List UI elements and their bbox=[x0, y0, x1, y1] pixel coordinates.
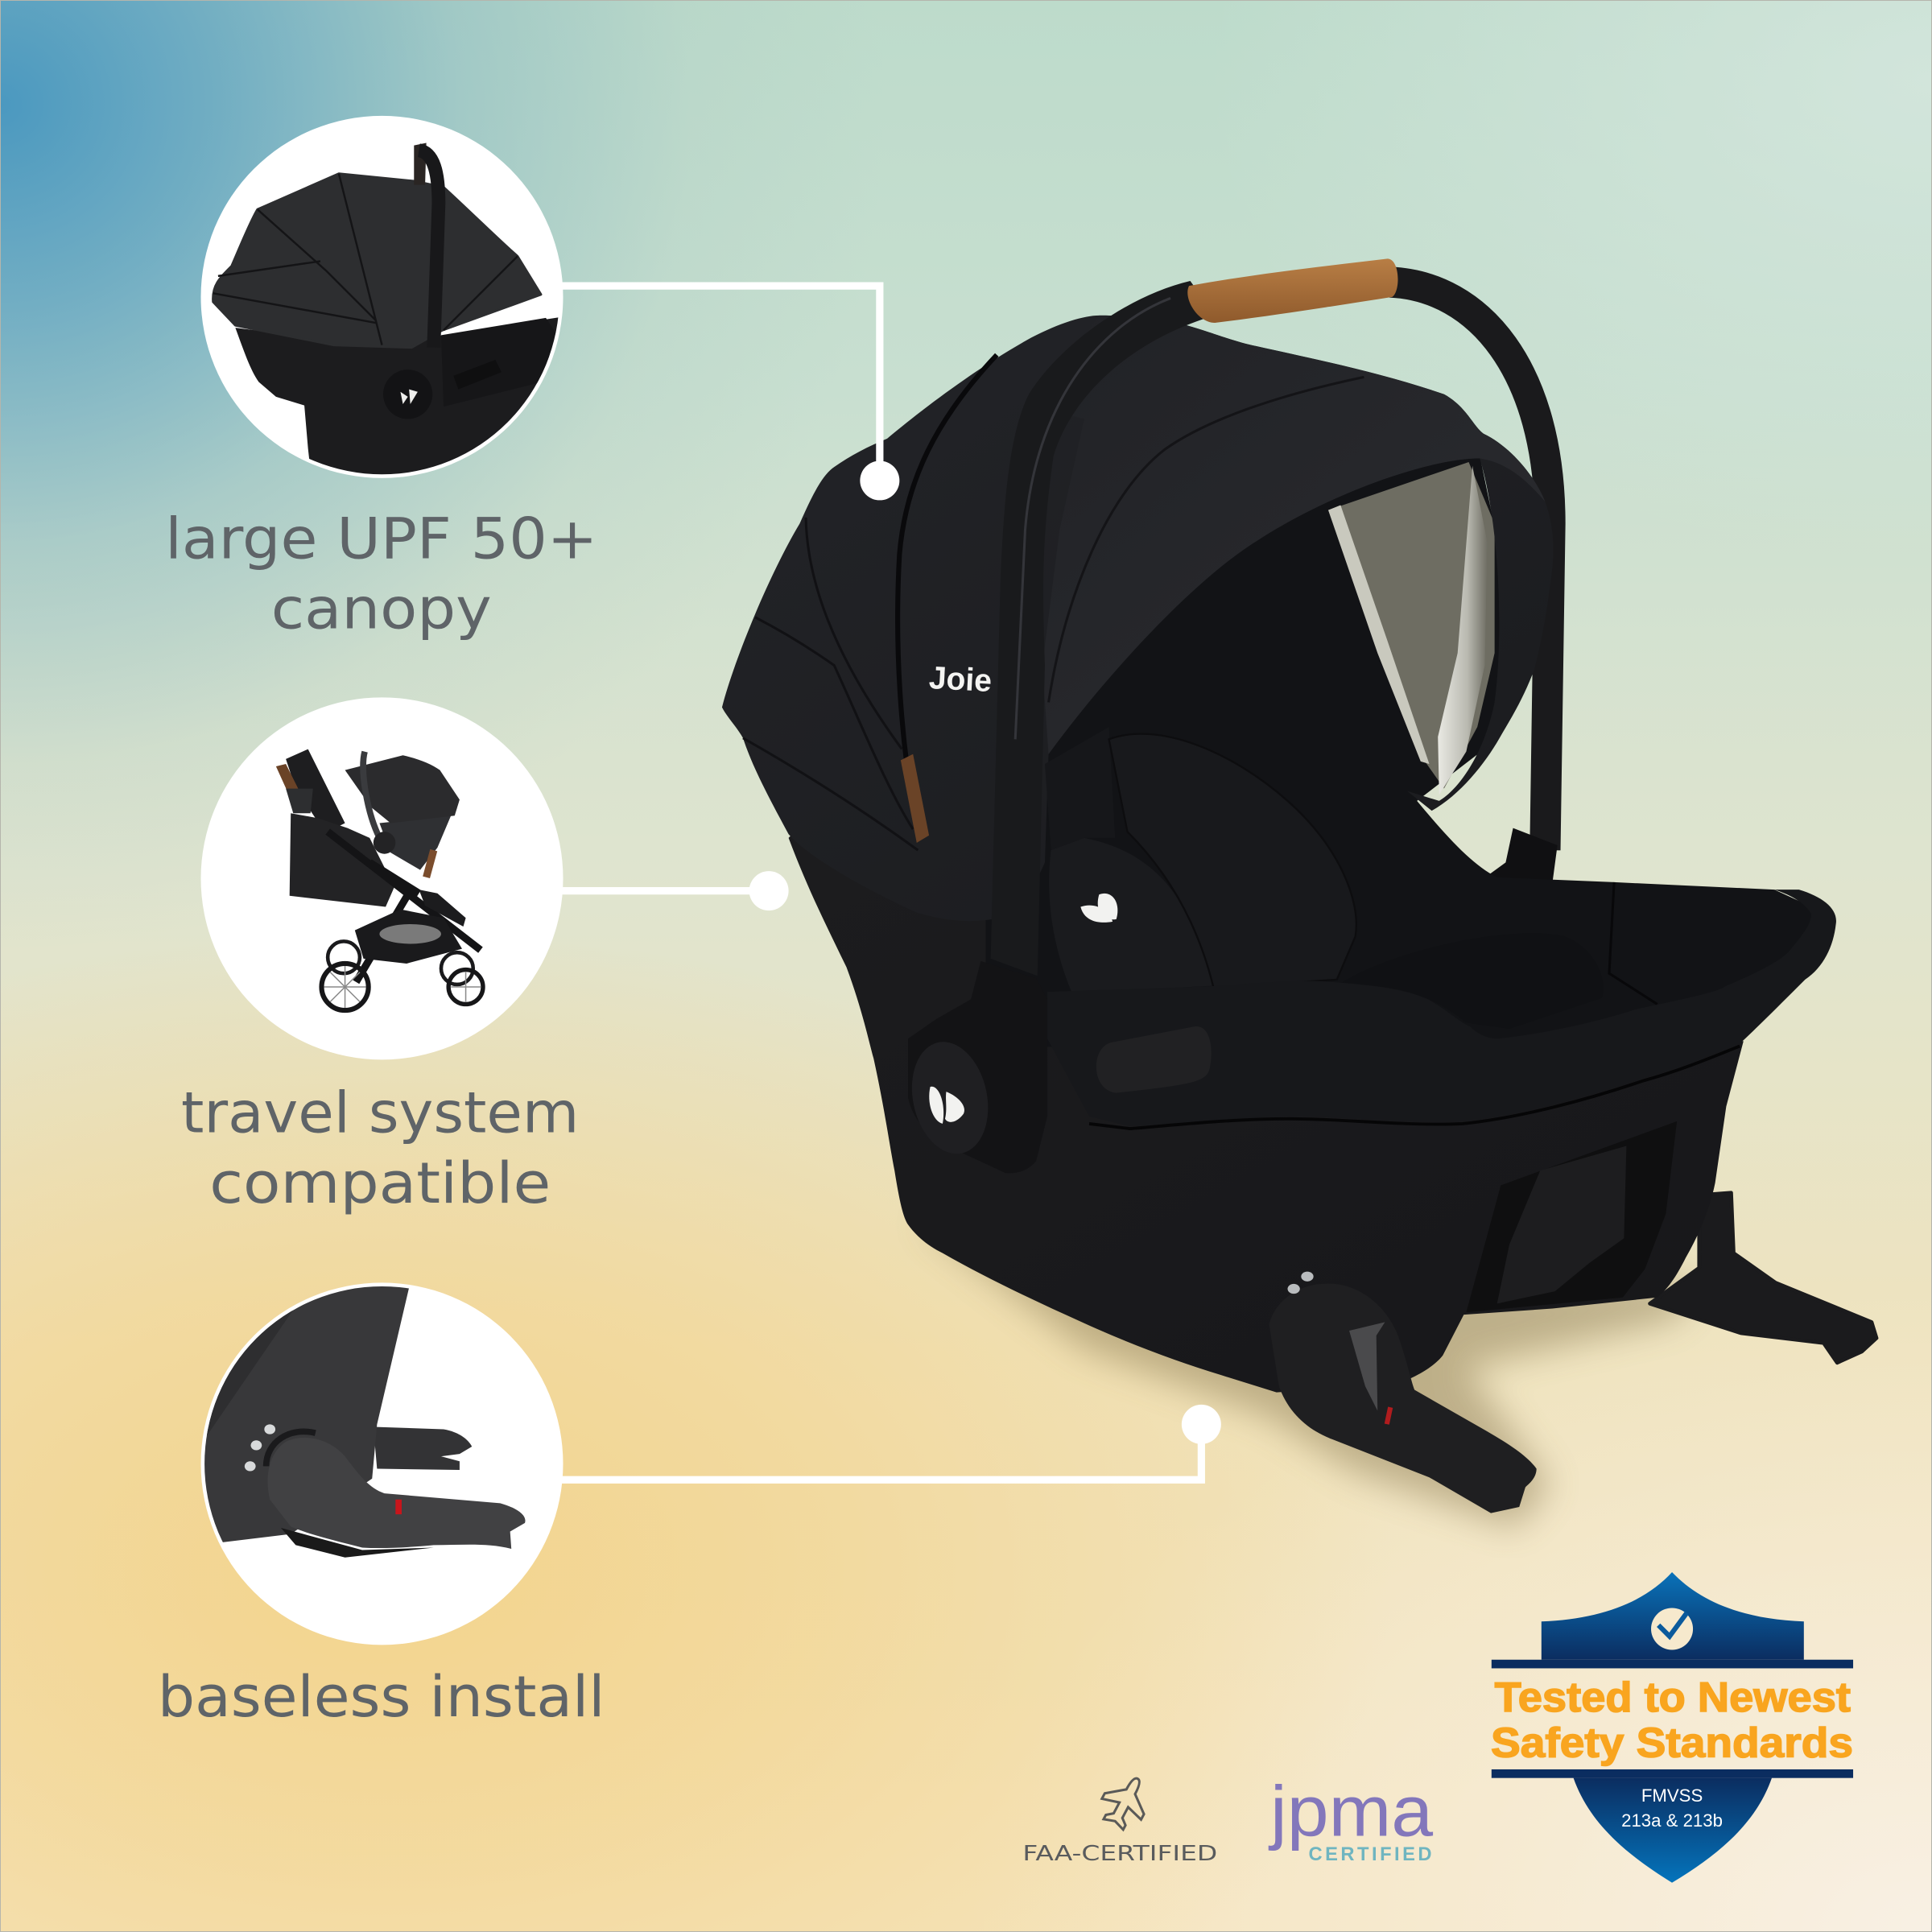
label: baseless install: baseless install bbox=[158, 1664, 605, 1730]
label: canopy bbox=[165, 506, 597, 642]
rear wheel near bbox=[321, 964, 369, 1010]
infant seat shell bbox=[379, 815, 451, 870]
icon: seat leaf logo bbox=[1080, 894, 1117, 923]
infant seat handle bbox=[363, 752, 379, 838]
stroller illustration bbox=[276, 749, 483, 1010]
tan frame grip bbox=[427, 850, 434, 877]
inset dots bbox=[245, 1424, 275, 1472]
safety badge bbox=[1491, 1572, 1853, 1883]
standard text: 213a & 213b bbox=[1621, 1810, 1723, 1831]
hub oval bbox=[902, 1034, 998, 1161]
canopy shell bbox=[722, 316, 1554, 921]
stroller frame bbox=[328, 832, 481, 982]
stroller back canopy bbox=[286, 749, 345, 833]
connector: baseless install bbox=[557, 1405, 1221, 1480]
stroller handle bbox=[276, 764, 298, 794]
inset handle bbox=[419, 151, 439, 348]
inset shell bbox=[204, 1286, 409, 1542]
icon: hub leaf logo bbox=[929, 1087, 964, 1124]
FAA certified mark: FAA-CERTIFIED bbox=[1022, 1842, 1217, 1866]
light trim strip bbox=[1328, 506, 1430, 764]
cup holder bbox=[286, 789, 313, 813]
shield bottom bbox=[1574, 1778, 1772, 1883]
inset darker wedge bbox=[206, 1311, 293, 1436]
near foot bbox=[1269, 1284, 1537, 1513]
under basket bbox=[355, 910, 462, 964]
rear handle pivot bbox=[1479, 828, 1558, 882]
front wheel near bbox=[448, 970, 483, 1004]
panel: canopy circle bbox=[200, 116, 579, 493]
inset button bbox=[457, 361, 499, 390]
label: travel system: compatible bbox=[209, 1150, 551, 1216]
lower band bbox=[1492, 1769, 1853, 1778]
leg cushion bbox=[1337, 933, 1604, 1029]
red indicator bbox=[1385, 1407, 1393, 1425]
inset handle grip end bbox=[414, 143, 427, 185]
seat rim bbox=[1047, 890, 1836, 1126]
badge headline bbox=[1491, 1674, 1853, 1767]
inset canopy bbox=[213, 174, 541, 348]
FAA certified mark bbox=[1022, 1769, 1217, 1866]
seat interior bbox=[985, 450, 1836, 1047]
olive canopy panel bbox=[1328, 462, 1495, 789]
zipper bbox=[898, 355, 997, 834]
label: travel system bbox=[181, 1080, 579, 1216]
upper band bbox=[1492, 1660, 1853, 1668]
front carry handle arm bbox=[991, 281, 1215, 976]
stroller basket seat bbox=[290, 813, 394, 907]
connector: canopy bbox=[557, 286, 899, 500]
label: canopy: large UPF 50+ bbox=[165, 506, 597, 572]
badge headline: Safety Standards bbox=[1491, 1720, 1853, 1767]
handle pivot hub bbox=[908, 961, 1047, 1173]
inset far foot bbox=[374, 1426, 472, 1470]
icon: airplane bbox=[1094, 1769, 1158, 1835]
head cushion bbox=[1049, 838, 1214, 993]
front wheel far bbox=[441, 952, 473, 985]
position dots bbox=[1287, 1272, 1314, 1294]
base inner plate bbox=[1497, 1146, 1626, 1303]
badge headline: Tested to Newest bbox=[1495, 1674, 1851, 1721]
inset near foot bbox=[267, 1438, 526, 1549]
inset canopy seams bbox=[213, 174, 518, 345]
rear wheel far bbox=[328, 941, 360, 973]
panel: baseless install circle bbox=[185, 1269, 563, 1645]
car seat main product bbox=[722, 258, 1876, 1528]
brand wordmark: Joie bbox=[928, 660, 993, 699]
JPMA certified mark: jpma bbox=[1268, 1772, 1434, 1852]
canopy seams bbox=[743, 518, 918, 850]
inset red indicator bbox=[395, 1500, 402, 1514]
basket mesh bbox=[379, 924, 441, 943]
silver strip bbox=[1438, 466, 1487, 795]
infant seat hub bbox=[374, 832, 395, 854]
far foot bbox=[1649, 1193, 1876, 1363]
rim release button bbox=[1096, 1026, 1212, 1093]
lower shell bbox=[789, 826, 1744, 1393]
inset ground shadow bbox=[281, 1528, 434, 1558]
shield top bbox=[1542, 1572, 1804, 1660]
JPMA certified mark: CERTIFIED bbox=[1309, 1844, 1432, 1865]
handle highlight bbox=[1015, 298, 1170, 739]
icon: check circle bbox=[1651, 1608, 1693, 1649]
body cushion bbox=[1109, 734, 1356, 989]
tan leather grip bbox=[1187, 258, 1397, 323]
standard text bbox=[1621, 1785, 1723, 1831]
base recess bbox=[1466, 1121, 1677, 1312]
seat strap bbox=[1609, 882, 1657, 1004]
infant seat canopy bbox=[345, 755, 460, 823]
leather zip pull bbox=[901, 754, 929, 843]
front brim panel bbox=[1035, 316, 1545, 754]
standard text: FMVSS bbox=[1641, 1785, 1703, 1806]
brim fold line bbox=[1049, 377, 1364, 702]
panel: travel system circle bbox=[200, 697, 563, 1059]
foot release lever bbox=[1349, 1322, 1385, 1411]
label: canopy: canopy bbox=[271, 576, 492, 642]
inset dial arc bbox=[266, 1431, 316, 1466]
footrest bbox=[419, 890, 466, 927]
inset pivot logo bbox=[400, 390, 418, 404]
rear carry handle arm bbox=[1390, 283, 1550, 850]
side support bbox=[1045, 727, 1115, 850]
connector: travel system bbox=[557, 871, 789, 910]
inset seat rim bbox=[441, 317, 555, 383]
inset pivot bbox=[383, 369, 432, 419]
ground shadow bbox=[918, 1220, 1700, 1528]
label: travel system: travel system bbox=[181, 1080, 579, 1146]
inset shell bbox=[235, 317, 559, 475]
rim side panel seam bbox=[1089, 1046, 1740, 1129]
